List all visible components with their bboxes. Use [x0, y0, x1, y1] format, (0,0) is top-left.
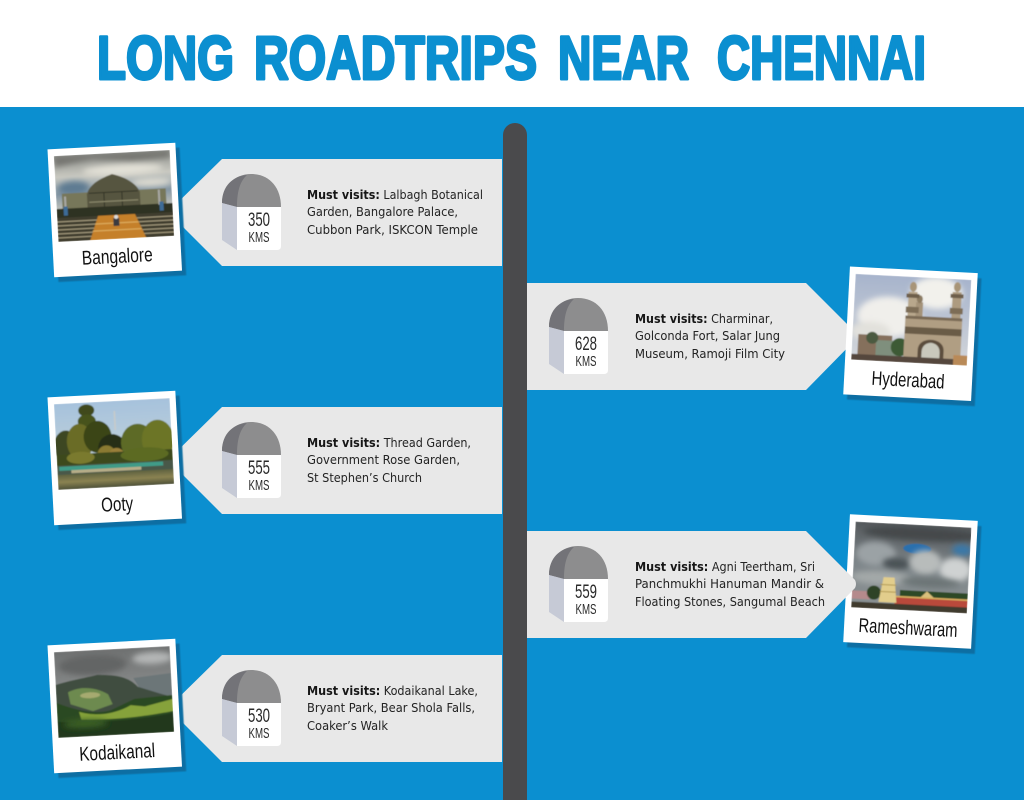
photo card: Kodaikanal [47, 639, 186, 778]
milestone: 555 kms [222, 422, 281, 498]
must visits text: Must visits: Lalbagh Botanical [307, 188, 483, 202]
must visits text: Coaker’s Walk [307, 719, 388, 733]
sign: Hyderabad [527, 283, 859, 390]
milestone: 559 kms [549, 546, 608, 622]
title: ROADTRIPS [254, 24, 537, 92]
photo card: Bangalore [47, 143, 186, 282]
photo card: Hyderabad [843, 266, 982, 406]
must visits text: Panchmukhi Hanuman Mandir & [635, 577, 824, 591]
milestone: 628 kms: 628 [575, 334, 597, 355]
milestone: 555 kms: 555 [248, 458, 270, 479]
milestone: 628 kms [549, 298, 608, 374]
title: NEAR [558, 24, 689, 92]
must visits text [307, 188, 483, 237]
must visits text: Garden, Bangalore Palace, [307, 205, 458, 219]
must visits text: Must visits: Kodaikanal Lake, [307, 684, 478, 698]
milestone: 350 kms [222, 174, 281, 250]
sign: Bangalore [168, 159, 502, 266]
signpost pole [503, 123, 527, 800]
must visits text: Golconda Fort, Salar Jung [635, 329, 780, 343]
milestone: 530 kms: 530 [248, 706, 270, 727]
milestone: 530 kms: KMS [248, 725, 270, 742]
city label: Bangalore [81, 244, 153, 270]
milestone: 628 kms: KMS [576, 353, 596, 370]
must visits text: Government Rose Garden, [307, 453, 460, 467]
sign: Ooty [168, 407, 502, 514]
panel: Rameshwaram [527, 514, 984, 654]
must visits text: Museum, Ramoji Film City [635, 347, 785, 361]
city label: Rameshwaram [858, 615, 958, 642]
must visits text [307, 436, 471, 485]
milestone: 350 kms: KMS [248, 229, 270, 246]
photo card: Ooty [47, 391, 186, 530]
milestone: 555 kms: KMS [248, 477, 270, 494]
must visits text: Bryant Park, Bear Shola Falls, [307, 701, 475, 715]
must visits text: Cubbon Park, ISKCON Temple [307, 223, 478, 237]
sign: Kodaikanal [168, 655, 502, 762]
must visits text: Must visits: Agni Teertham, Sri [635, 560, 815, 574]
must visits text: St Stephen’s Church [307, 471, 422, 485]
panel: Bangalore [47, 143, 502, 282]
panel: Kodaikanal [47, 639, 502, 778]
must visits text [307, 684, 478, 733]
must visits text [635, 312, 785, 361]
milestone: 530 kms [222, 670, 281, 746]
city label: Hyderabad [871, 368, 945, 394]
panel: Hyderabad [527, 266, 982, 406]
title [97, 24, 926, 92]
city label: Kodaikanal [79, 740, 156, 766]
must visits text: Floating Stones, Sangumal Beach [635, 595, 825, 609]
photo card: Rameshwaram [843, 514, 984, 654]
city label: Ooty [101, 493, 134, 517]
milestone: 559 kms: 559 [575, 582, 597, 603]
header band [0, 0, 1024, 107]
milestone: 559 kms: KMS [576, 601, 596, 618]
must visits text: Must visits: Charminar, [635, 312, 773, 326]
title: LONG [97, 24, 234, 92]
panel: Ooty [47, 391, 502, 530]
title: CHENNAI [717, 24, 926, 92]
sign: Rameshwaram [527, 531, 856, 638]
must visits text [635, 560, 825, 609]
must visits text: Must visits: Thread Garden, [307, 436, 471, 450]
milestone: 350 kms: 350 [248, 210, 270, 231]
